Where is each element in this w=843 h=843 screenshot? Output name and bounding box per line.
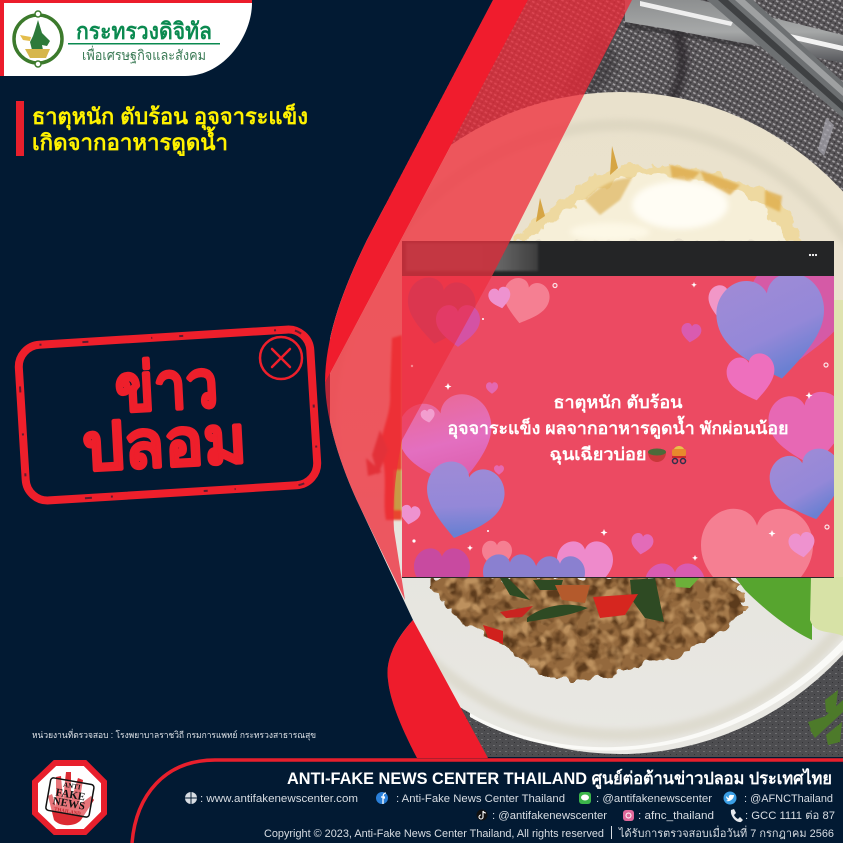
red diagonal band [325, 0, 528, 383]
icon: instagram [623, 810, 634, 821]
fried egg [512, 146, 802, 242]
plate [308, 92, 843, 754]
translucent red overlay [325, 0, 632, 600]
icon: globe [185, 792, 197, 804]
red tint across post body [402, 276, 492, 440]
panel: ministry logo [0, 0, 252, 76]
icon: twitter [724, 792, 736, 804]
copyright and verification date: Copyright © 2023, Anti-Fake News Center Thailand, All rights reserved [264, 828, 604, 840]
icon: phone [731, 809, 743, 822]
ministry name: กระทรวงดิจิทัล [76, 18, 212, 44]
icon: facebook [376, 792, 388, 804]
contact links: : Anti-Fake News Center Thailand [396, 793, 565, 805]
logo: anti-fake news octagon [35, 763, 104, 832]
panel: social post screenshot [402, 241, 834, 578]
red tint across post header [402, 241, 510, 276]
logo text: THAILAND [54, 807, 81, 817]
panel: navy background [0, 0, 493, 843]
contact links: : @AFNCThailand [744, 793, 833, 805]
heading: ธาตุหนัก ตับร้อน อุจจาระแข็ง [32, 102, 308, 131]
panel: footer [132, 760, 843, 843]
heading: เกิดจากอาหารดูดน้ำ [32, 126, 228, 157]
stamp: fake news [18, 328, 318, 502]
contact links: : afnc_thailand [638, 810, 714, 822]
icon: noodle bowl emoji [648, 448, 666, 462]
basil pork [432, 577, 743, 680]
rice seen through overlay [366, 335, 402, 520]
ministry tagline: เพื่อเศรษฐกิจและสังคม [82, 46, 206, 64]
background photo: plate of basil pork and fried egg on grey cloth [308, 0, 843, 760]
copyright and verification date: ได้รับการตรวจสอบเมื่อวันที่ 7 กรกฎาคม 2566 [618, 825, 834, 840]
logo text: FAKE [55, 787, 86, 804]
post background with hearts [402, 276, 834, 577]
cutlery [625, 0, 843, 118]
icon: hot pot emoji [672, 446, 686, 464]
contact links: : GCC 1111 ต่อ 87 [745, 810, 835, 822]
icon: tiktok [476, 810, 488, 820]
footer title: ANTI-FAKE NEWS CENTER THAILAND ศูนย์ต่อต้านข่าวปลอม ประเทศไทย [287, 768, 832, 790]
post message text [448, 393, 788, 465]
basil leaf and lettuce [675, 300, 843, 640]
stamp text [78, 345, 248, 484]
contact links [185, 792, 835, 822]
red lower lobe [387, 620, 488, 758]
icon: cross in circle [260, 337, 302, 379]
contact links: : @antifakenewscenter [596, 793, 712, 805]
herb sprig [808, 690, 843, 745]
icon: line [579, 792, 591, 804]
post message text: ฉุนเฉียวบ่อย [550, 444, 646, 465]
logo text: ANTI [63, 781, 81, 792]
contact links: : www.antifakenewscenter.com [200, 793, 358, 805]
post message text: ธาตุหนัก ตับร้อน [554, 393, 683, 413]
heading [16, 101, 308, 157]
icon: red hand [48, 772, 94, 825]
logo text [45, 777, 94, 819]
post header bar [402, 241, 834, 276]
post message text: อุจจาระแข็ง ผลจากอาหารดูดน้ำ พักผ่อนน้อย [448, 415, 788, 440]
copyright and verification date [264, 825, 834, 840]
contact links: : @antifakenewscenter [492, 810, 607, 822]
icon: ministry emblem [14, 11, 62, 67]
logo text: NEWS [52, 795, 86, 813]
stamp text: ข่าว [113, 346, 220, 426]
stamp text: ปลอม [81, 402, 248, 484]
source agency note: หน่วยงานที่ตรวจสอบ : โรงพยาบาลราชวิถี กรมการแพทย์ กระทรวงสาธารณสุข [32, 728, 316, 741]
